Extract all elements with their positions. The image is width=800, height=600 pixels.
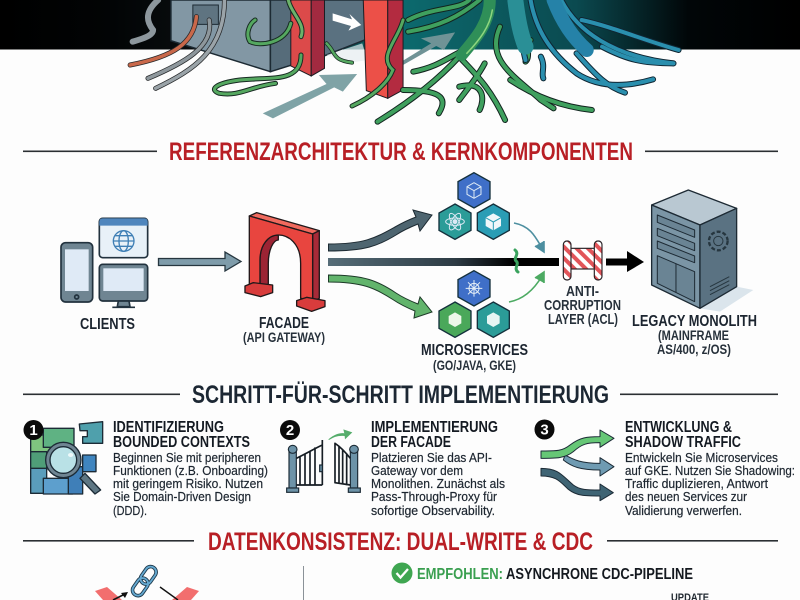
text block: step 1: Funktionen (z.B. Onboarding): [113, 463, 268, 478]
arrow: facade to ACL through bar: [328, 258, 559, 266]
label: anti-corruption layer: ANTI-: [566, 283, 599, 300]
arrow: lower services to ACL: [509, 272, 544, 302]
icon: legacy server: [652, 190, 753, 312]
text block: step 3: SHADOW TRAFFIC: [625, 434, 741, 451]
text block: step 1: [113, 419, 268, 518]
section heading: Datenkonsistenz: DATENKONSISTENZ: DUAL-WRITE & CDC: [208, 528, 593, 556]
icon: recommended check: [392, 562, 412, 584]
label: anti-corruption layer: LAYER (ACL): [548, 311, 618, 328]
heading: recommended CDC pipeline: EMPFOHLEN:: [417, 566, 503, 583]
badge: step 2: 2: [286, 422, 294, 439]
label: clients: CLIENTS: [80, 316, 135, 333]
badge: step 3: 3: [540, 422, 549, 438]
arrow: ACL to monolith: [606, 251, 644, 272]
icon: lower microservices hexagons: [439, 271, 509, 337]
icon: puzzle and magnifier: [31, 422, 103, 494]
text block: step 1: Beginnen Sie mit peripheren: [113, 450, 261, 465]
label: microservices: [421, 342, 528, 373]
icon: facade arch: [245, 213, 325, 311]
arrow: clients to facade: [158, 252, 241, 271]
icon: upper microservices hexagons: [439, 173, 509, 239]
divider: [303, 566, 304, 600]
badge: step 1: [24, 420, 44, 440]
text block: step 1: BOUNDED CONTEXTS: [113, 434, 250, 451]
icon: opening gate: [287, 429, 360, 492]
section heading: Schritt für Schritt: SCHRITT-FÜR-SCHRITT IMPLEMENTIERUNG: [192, 380, 609, 409]
label: anti-corruption layer: [544, 283, 621, 328]
label: microservices: MICROSERVICES: [421, 342, 528, 359]
text block: step 3: Validierung verwerfen.: [625, 503, 742, 518]
label: legacy monolith: LEGACY MONOLITH: [632, 313, 757, 330]
text block: step 2: DER FACADE: [371, 434, 451, 451]
label: microservices: (GO/JAVA, GKE): [433, 358, 516, 373]
text block: step 3: ENTWICKLUNG &: [625, 419, 732, 436]
label: legacy monolith: [632, 313, 757, 357]
icon: traffic split arrows: [541, 430, 614, 501]
label: facade: (API GATEWAY): [243, 330, 325, 345]
heading: recommended CDC pipeline: [417, 566, 693, 583]
hero illustration: facade and roots: [0, 0, 800, 122]
text block: step 2: IMPLEMENTIERUNG: [371, 419, 498, 436]
text block: step 1: mit geringem Risiko. Nutzen: [113, 476, 263, 491]
heading: recommended CDC pipeline: ASYNCHRONE CDC-PIPELINE: [506, 566, 693, 583]
arrow: facade to lower microservices: [328, 275, 432, 318]
icon: dual write broken chain: [95, 564, 199, 600]
text block: step 2: Pass-Through-Proxy für: [371, 489, 498, 504]
icon: anti-corruption barrier: [563, 241, 602, 280]
text block: step 1: Sie Domain-Driven Design: [113, 489, 251, 504]
badge: step 3: [534, 420, 554, 440]
text block: step 2: [371, 419, 505, 518]
text block: step 2: Platzieren Sie das API-: [371, 450, 492, 465]
text block: step 3: Traffic duplizieren, Antwort: [625, 476, 768, 491]
text block: step 1: IDENTIFIZIERUNG: [113, 419, 224, 436]
icon: clients devices: [61, 218, 148, 307]
label: facade: [243, 315, 325, 345]
text block: step 1: (DDD).: [113, 503, 147, 518]
badge: step 1: 1: [29, 422, 38, 439]
text block: step 2: sofortige Observability.: [371, 503, 495, 518]
icon: green bracket: [515, 250, 518, 272]
arrow: upper services to ACL: [514, 223, 544, 252]
text block: step 3: Entwickeln Sie Microservices: [625, 450, 778, 465]
text block: step 2: Monolithen. Zunächst als: [371, 476, 505, 491]
label: anti-corruption layer: CORRUPTION: [544, 297, 621, 314]
arrow: facade to upper microservices: [328, 210, 432, 251]
text block: step 3: des neuen Services zur: [625, 489, 748, 504]
label: legacy monolith: (MAINFRAME: [658, 328, 729, 343]
text block: step 2: Gateway vor dem: [371, 463, 463, 478]
text block: step 3: [625, 419, 795, 518]
section heading: Referenzarchitektur: REFERENZARCHITEKTUR & KERNKOMPONENTEN: [169, 138, 633, 166]
label: facade: FACADE: [259, 315, 309, 332]
badge: step 2: [280, 420, 300, 440]
label: legacy monolith: AS/400, z/OS): [657, 342, 731, 357]
